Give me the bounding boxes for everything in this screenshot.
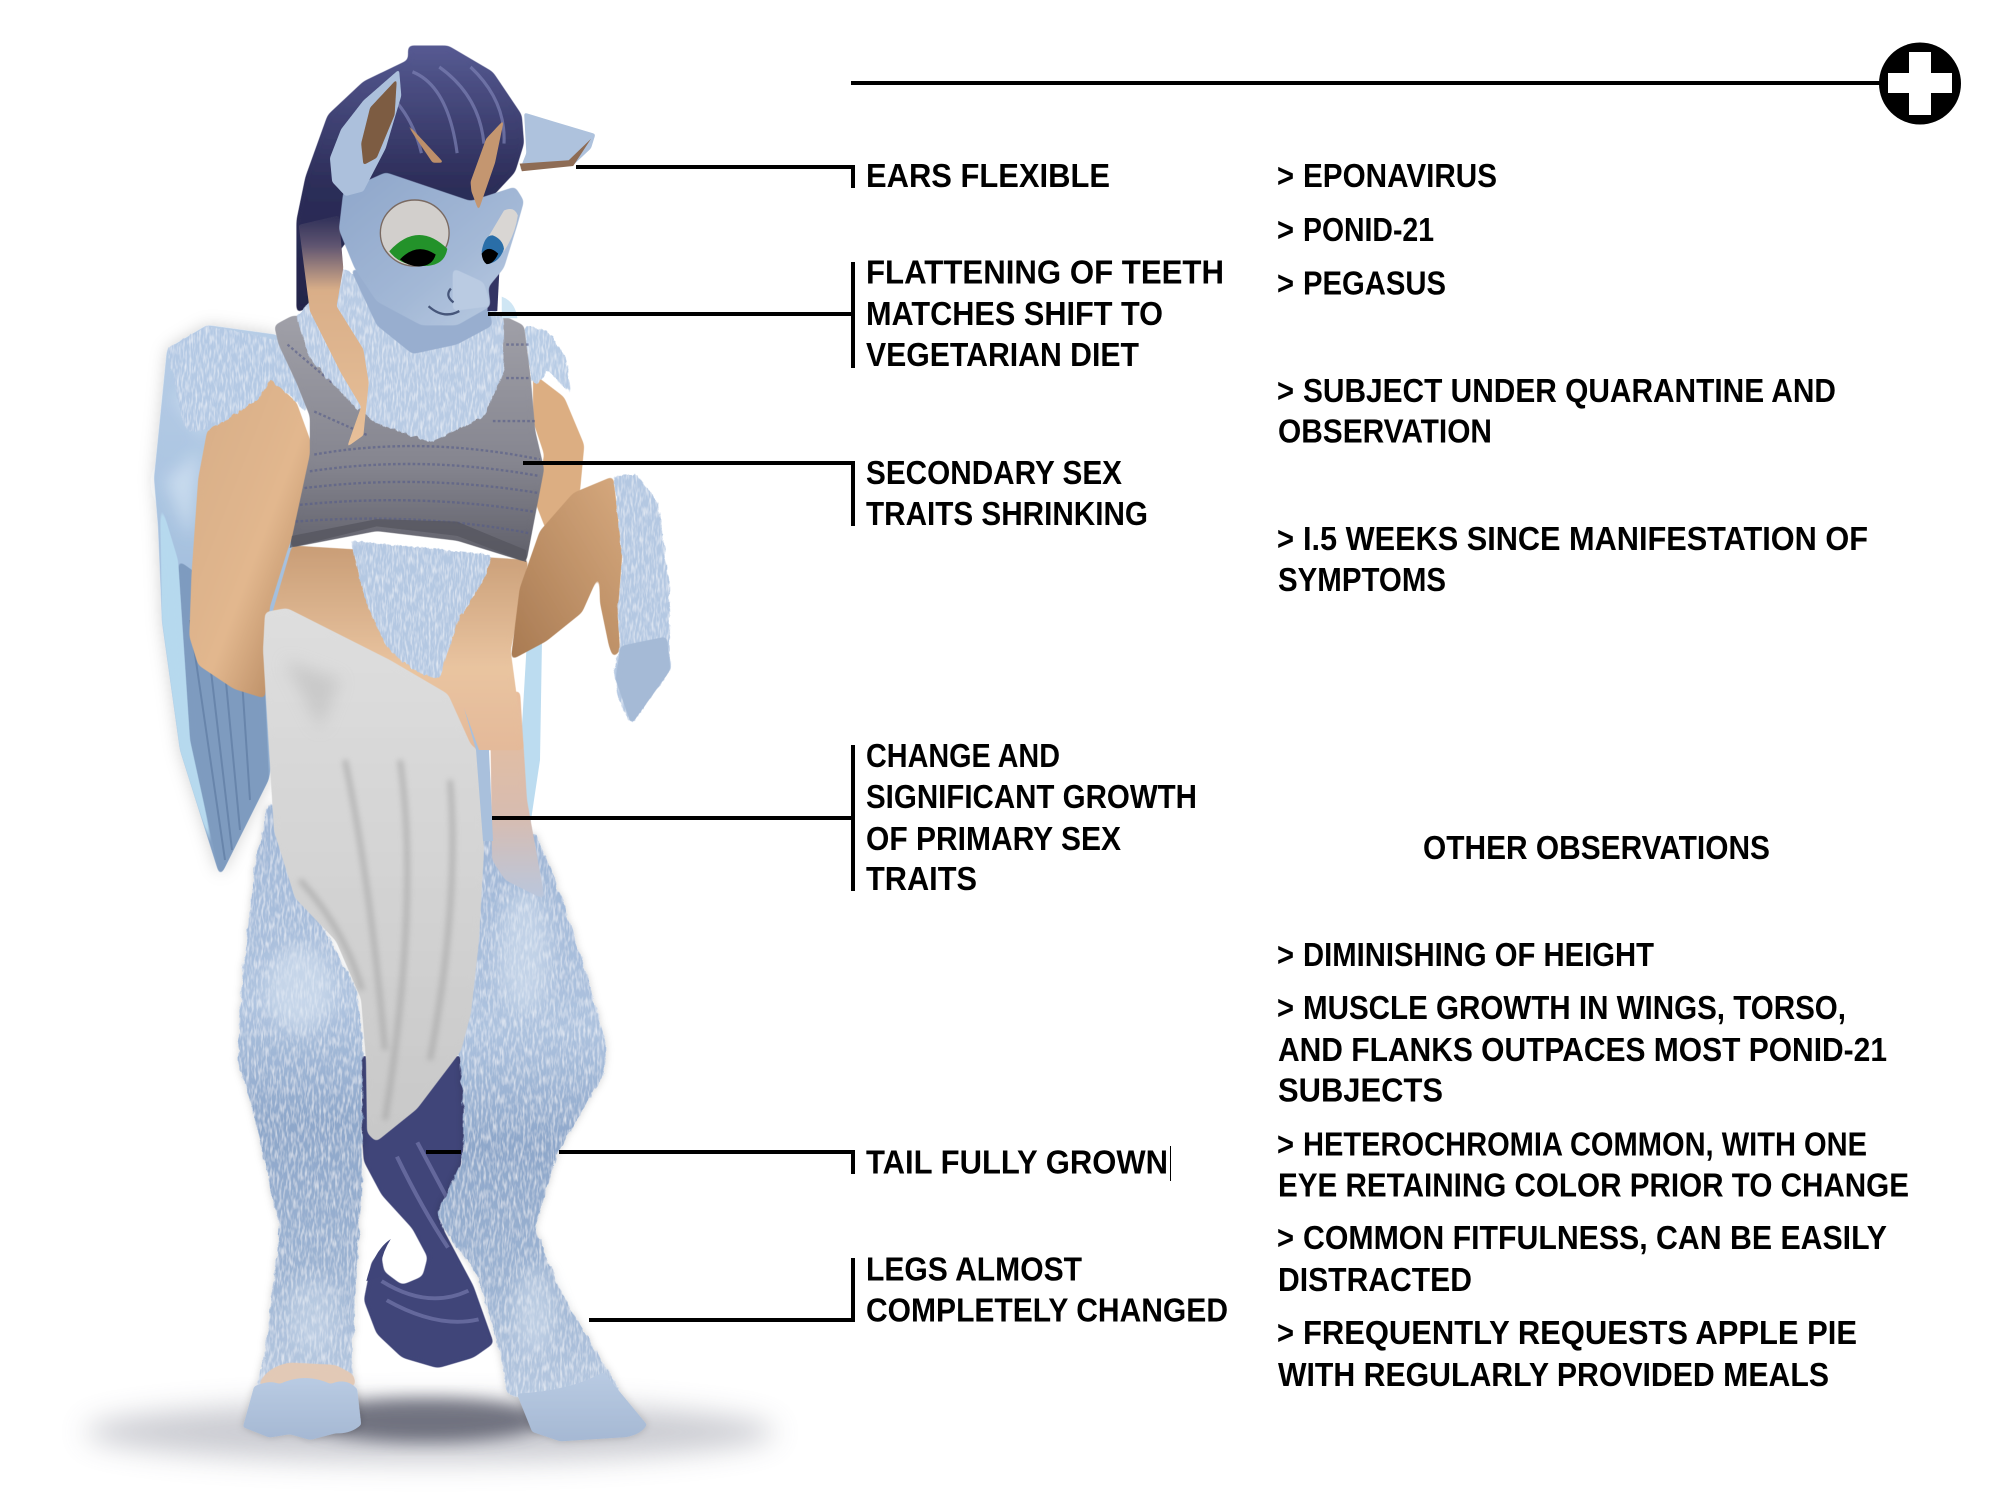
observations list: > bbox=[1277, 989, 1294, 1026]
callout: primary traits: SIGNIFICANT GROWTH bbox=[866, 778, 1197, 815]
right forearm and hand bbox=[511, 476, 622, 660]
right hoof bbox=[517, 1372, 647, 1441]
callout: primary traits bbox=[492, 737, 1197, 897]
quarantine note: SUBJECT UNDER QUARANTINE AND bbox=[1303, 372, 1836, 409]
upper body bbox=[167, 45, 670, 750]
heading: other observations: OTHER OBSERVATIONS bbox=[1423, 829, 1770, 866]
observations list: > bbox=[1277, 1219, 1294, 1256]
right ear bbox=[520, 112, 596, 171]
subject identification list: > bbox=[1277, 264, 1294, 302]
right upper arm bbox=[533, 373, 584, 531]
right eye bbox=[482, 209, 518, 264]
subject identification list bbox=[1277, 157, 1497, 302]
forelimb fur bbox=[613, 474, 670, 725]
symptom time note: SYMPTOMS bbox=[1278, 561, 1446, 598]
callout: primary traits: OF PRIMARY SEX bbox=[866, 820, 1121, 857]
callout: tail: TAIL FULLY GROWN bbox=[866, 1144, 1168, 1180]
observations list: FREQUENTLY REQUESTS APPLE PIE bbox=[1303, 1314, 1857, 1351]
mane highlights bbox=[386, 67, 504, 153]
left ear bbox=[330, 69, 401, 196]
forelock peach bbox=[471, 120, 504, 211]
callout: secondary traits: SECONDARY SEX bbox=[866, 454, 1122, 491]
left eye bbox=[380, 200, 449, 267]
observations list bbox=[1277, 936, 1909, 1393]
callout: ears: EARS FLEXIBLE bbox=[866, 157, 1110, 194]
shoulder fur left bbox=[167, 325, 310, 431]
shoulder fur right bbox=[524, 325, 573, 397]
callout: secondary traits bbox=[523, 454, 1148, 532]
callout: teeth bbox=[488, 254, 1224, 373]
towel side strip bbox=[464, 708, 493, 841]
header line with medical cross bbox=[851, 42, 1961, 124]
observations list: WITH REGULARLY PROVIDED MEALS bbox=[1278, 1356, 1829, 1393]
symptom time note bbox=[1277, 520, 1868, 598]
observations list: HETEROCHROMIA COMMON, WITH ONE bbox=[1303, 1126, 1867, 1163]
callout: primary traits: CHANGE AND bbox=[866, 737, 1060, 774]
callout: tail bbox=[426, 1144, 1171, 1181]
crop top bbox=[274, 316, 544, 562]
muzzle dark sliver and wing bbox=[502, 297, 517, 318]
towel bbox=[263, 608, 484, 1142]
icon: medical cross bbox=[1879, 42, 1961, 124]
right hind leg bbox=[438, 831, 647, 1441]
left arm bbox=[189, 378, 312, 699]
callout: legs: COMPLETELY CHANGED bbox=[866, 1292, 1228, 1329]
head bbox=[339, 120, 524, 325]
observations list: MUSCLE GROWTH IN WINGS, TORSO, bbox=[1303, 989, 1846, 1026]
subject identification list: > bbox=[1277, 157, 1294, 194]
observations list: COMMON FITFULNESS, CAN BE EASILY bbox=[1303, 1219, 1887, 1256]
callout: teeth: FLATTENING OF TEETH bbox=[866, 254, 1224, 290]
quarantine note bbox=[1277, 372, 1836, 450]
callout: secondary traits: TRAITS SHRINKING bbox=[866, 495, 1148, 532]
symptom time note: > bbox=[1277, 520, 1294, 557]
left hind leg bbox=[238, 798, 362, 1440]
abdomen bbox=[270, 545, 529, 750]
callout: primary traits: TRAITS bbox=[866, 860, 977, 897]
subject identification list: EPONAVIRUS bbox=[1303, 157, 1497, 194]
hip skin bbox=[490, 690, 545, 900]
quarantine note: OBSERVATION bbox=[1278, 413, 1492, 450]
observations list: > bbox=[1277, 1126, 1294, 1163]
observations list: SUBJECTS bbox=[1278, 1072, 1443, 1109]
observations list: DISTRACTED bbox=[1278, 1261, 1472, 1298]
subject identification list: > bbox=[1277, 211, 1294, 248]
ground shadow bbox=[85, 1398, 775, 1462]
subject identification list: PEGASUS bbox=[1303, 264, 1446, 302]
left wing bbox=[154, 325, 300, 877]
illustration: ponid subject figure bbox=[85, 45, 775, 1462]
callout: teeth: VEGETARIAN DIET bbox=[866, 336, 1139, 373]
subject identification list: PONID-21 bbox=[1303, 211, 1434, 248]
hanging strand bbox=[299, 215, 369, 464]
right wing sliver bbox=[520, 640, 542, 860]
observations list: EYE RETAINING COLOR PRIOR TO CHANGE bbox=[1278, 1167, 1909, 1204]
observations list: DIMINISHING OF HEIGHT bbox=[1303, 936, 1654, 973]
belly fur bbox=[350, 541, 493, 679]
tail bbox=[356, 1056, 494, 1368]
callout: legs bbox=[589, 1251, 1228, 1329]
left hoof bbox=[243, 1378, 361, 1440]
observations list: > bbox=[1277, 1314, 1294, 1351]
neck and chest fur bbox=[296, 268, 504, 443]
symptom time note: I.5 WEEKS SINCE MANIFESTATION OF bbox=[1303, 520, 1868, 557]
smile and nostril bbox=[429, 289, 459, 314]
callout: teeth: MATCHES SHIFT TO bbox=[866, 295, 1163, 332]
quarantine note: > bbox=[1277, 372, 1294, 409]
left fetlock band bbox=[258, 1362, 356, 1386]
observations list: AND FLANKS OUTPACES MOST PONID-21 bbox=[1278, 1031, 1887, 1068]
back mane bbox=[296, 45, 524, 313]
observations list: > bbox=[1277, 936, 1294, 973]
callout: legs: LEGS ALMOST bbox=[866, 1251, 1082, 1288]
callout: ears bbox=[576, 157, 1110, 194]
